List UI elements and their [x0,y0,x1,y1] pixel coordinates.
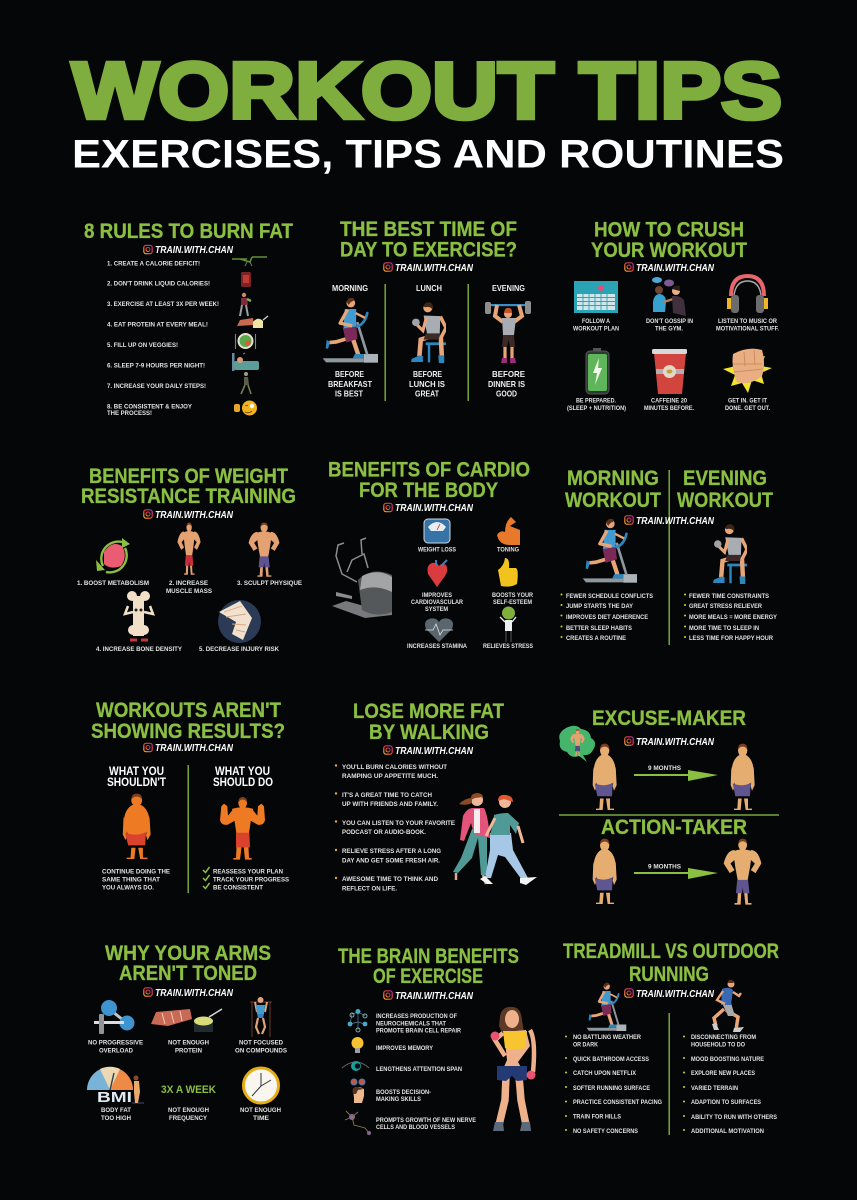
icon: elliptical machine [332,538,392,618]
column: morning [323,283,378,398]
list: morning benefits: JUMP STARTS THE DAY [566,603,633,610]
heading [81,464,296,508]
list: treadmill: QUICK BATHROOM ACCESS [573,1056,649,1063]
arrow: nine months: 9 MONTHS [648,864,682,870]
illustration: treadmill [583,519,637,583]
panel: best time of day [323,217,531,398]
list: walking benefits: REFLECT ON LIFE. [342,886,397,892]
subtitle: EXERCISES, TIPS AND ROUTINES [72,132,784,176]
handle: TRAIN.WITH.CHAN [636,989,715,1000]
heading: TREADMILL VS OUTDOOR [563,939,779,963]
icon: overhead press [485,301,531,363]
item: cardiovascular system: IMPROVES [422,592,452,599]
heading: HOW TO CRUSH [594,218,744,242]
illustration: thought cloud [559,726,595,762]
panel: workouts not showing results [91,698,289,893]
item: stamina [407,618,467,650]
heading [91,698,285,743]
list: treadmill: NO SAFETY CONCERNS [573,1128,638,1135]
handle: TRAIN.WITH.CHAN [395,991,474,1002]
item: headphones [716,276,779,332]
handle: TRAIN.WITH.CHAN [636,737,715,748]
heading [105,941,271,985]
list: evening benefits [684,593,777,642]
item: increase muscle mass: 2. INCREASE [169,580,208,587]
item: protein [151,1009,222,1054]
heading: evening workout [677,466,773,512]
list: evening benefits: MORE TIME TO SLEEP IN [689,625,759,632]
item: stamina: INCREASES STAMINA [407,643,467,650]
heading [591,218,747,262]
column: lunch [409,283,446,398]
icon: plate of veggies [236,333,256,349]
handle: TRAIN.WITH.CHAN [395,263,474,274]
item: fist [723,349,772,412]
list: outdoor: ADAPTION TO SURFACES [691,1099,761,1106]
item: increase muscle mass [166,523,212,595]
column: what you shouldn't: CONTINUE DOING THE [102,868,170,876]
item: workout plan [573,281,619,332]
handle: TRAIN.WITH.CHAN [636,516,715,527]
list: treadmill: PRACTICE CONSISTENT PACING [573,1099,662,1106]
list: walking benefits: RELIEVE STRESS AFTER A LONG [342,848,441,855]
heading: RESISTANCE TRAINING [81,484,296,508]
item: workout plan: WORKOUT PLAN [573,326,619,332]
item: time: NOT ENOUGH [240,1107,281,1114]
heading [563,939,779,986]
heading [338,944,519,988]
item: time [240,1068,281,1122]
handle: TRAIN.WITH.CHAN [636,263,715,274]
item: sculpt physique: 3. SCULPT PHYSIQUE [237,580,302,587]
rules list: 6. SLEEP 7-9 HOURS PER NIGHT! [107,362,205,370]
panel: weight resistance training [77,464,302,653]
item: attention span: LENGTHENS ATTENTION SPAN [376,1066,462,1073]
item: neurochemicals [348,1009,461,1034]
rules list: 7. INCREASE YOUR DAILY STEPS! [107,383,206,390]
item: coffee: MINUTES BEFORE. [644,405,694,412]
item: headphones: LISTEN TO MUSIC OR [718,318,777,325]
column: morning: MORNING [332,283,368,293]
heading: morning workout: WORKOUT [565,488,661,512]
icon: man with dumbbell [240,293,251,316]
rules list: THE PROCESS! [107,410,152,417]
handle: TRAIN.WITH.CHAN [395,503,474,514]
list: outdoor: ABILITY TO RUN WITH OTHERS [691,1114,777,1121]
list: outdoor: DISCONNECTING FROM [691,1034,756,1041]
panel: how to crush your workout [567,218,779,412]
column: what you should do: WHAT YOU [215,764,270,778]
item: cardiovascular system [411,560,463,613]
heading: evening workout: WORKOUT [677,488,773,512]
item: neurochemicals: PROMOTE BRAIN CELL REPAIR [376,1028,461,1034]
item: injury risk [199,600,279,653]
list: treadmill [565,1034,662,1135]
heading: DAY TO EXERCISE? [340,238,517,262]
list: evening benefits: FEWER TIME CONSTRAINTS [689,593,769,600]
heading: SHOWING RESULTS? [91,719,285,743]
column: evening: BEFORE [492,369,525,379]
item: battery: (SLEEP + NUTRITION) [567,405,626,412]
item: coffee [644,349,694,412]
panel: morning vs evening workout [560,466,777,645]
item: body fat: TOO HIGH [101,1115,131,1122]
column: evening: EVENING [492,283,525,293]
item: compounds [235,997,287,1054]
item: headphones: MOTIVATIONAL STUFF. [716,326,779,332]
list: outdoor [683,1034,777,1135]
column: what you shouldn't [102,764,170,892]
illustration: outdoor runner [712,980,744,1032]
illustration: treadmill runner [586,983,626,1031]
heading: evening workout: EVENING [683,466,767,490]
panel: lose more fat by walking [335,699,537,892]
panel: treadmill vs outdoor running [563,939,779,1135]
item: toning [497,517,520,554]
rules list: 1. CREATE A CALORIE DEFICIT! [107,260,200,267]
item: self-esteem [492,558,533,606]
item: frequency: NOT ENOUGH [168,1107,209,1114]
handle: TRAIN.WITH.CHAN [395,746,474,757]
item: progressive overload: OVERLOAD [99,1048,133,1054]
item: coffee: CAFFEINE 20 [651,398,687,404]
list: evening benefits: MORE MEALS = MORE ENERGY [689,614,777,621]
item: protein: NOT ENOUGH [168,1040,209,1046]
title: WORKOUT TIPS [72,46,782,135]
item: cardiovascular system: SYSTEM [425,606,448,613]
list: morning benefits: IMPROVES DIET ADHERENCE [566,614,648,621]
item: weight loss [418,519,456,554]
column: lunch: BEFORE [413,369,442,379]
item: memory: IMPROVES MEMORY [376,1045,433,1052]
item: frequency: FREQUENCY [169,1115,207,1122]
icon: sleeping in bed [232,353,259,371]
rules list: 8. BE CONSISTENT & ENJOY [107,404,192,410]
icon: calorie balance [232,257,267,266]
item: body fat: BMI [97,1090,132,1106]
heading: excuse-maker: EXCUSE-MAKER [592,706,746,730]
item: boost metabolism [77,538,149,587]
handle: TRAIN.WITH.CHAN [155,743,234,754]
illustration: woman with dumbbells [490,1007,536,1131]
item: decision making: MAKING SKILLS [376,1096,421,1103]
list: walking benefits: IT'S A GREAT TIME TO CATCH [342,792,432,799]
figure: excuse-maker before [593,744,617,810]
column: evening: DINNER IS [488,379,525,389]
heading: RUNNING [629,962,709,986]
item: cardiovascular system: CARDIOVASCULAR [411,599,463,606]
icon: thumb and emoji [234,400,257,416]
list: outdoor: VARIED TERRAIN [691,1085,738,1092]
item: gossip: THE GYM. [655,326,683,332]
item: compounds: ON COMPOUNDS [235,1048,287,1054]
item: injury risk: 5. DECREASE INJURY RISK [199,646,279,653]
illustration: couple walking [453,793,537,885]
column: what you shouldn't: WHAT YOU [109,764,164,778]
item: body fat [87,1067,144,1122]
icon: walking man [241,372,251,394]
item: neurochemicals: INCREASES PRODUCTION OF [376,1013,457,1020]
handle: TRAIN.WITH.CHAN [155,988,234,999]
column: evening [485,283,531,398]
heading: THE BEST TIME OF [340,217,517,241]
arrow: nine months [634,864,718,879]
rules list: 2. DON'T DRINK LIQUID CALORIES! [107,281,210,288]
item: fist: DONE. GET OUT. [725,405,770,412]
item: frequency: 3X A WEEK [161,1084,216,1096]
panel: benefits of cardio [328,458,533,650]
item: compounds: NOT FOCUSED [239,1040,283,1046]
heading: FOR THE BODY [359,478,498,502]
heading: LOSE MORE FAT [353,699,504,723]
item: nerve cells: PROMPTS GROWTH OF NEW NERVE [376,1117,476,1124]
column: what you should do: SHOULD DO [213,775,273,789]
heading: OF EXERCISE [373,964,483,988]
item: body fat: BODY FAT [101,1107,132,1114]
list: treadmill: OR DARK [573,1042,598,1048]
heading: YOUR WORKOUT [591,238,747,262]
item: time: TIME [253,1115,270,1122]
column: morning: IS BEST [335,388,363,398]
item: bone density [96,591,182,653]
panel: why your arms aren't toned [87,941,287,1122]
column: lunch: GREAT [415,388,439,398]
item: bone density: 4. INCREASE BONE DENSITY [96,646,182,653]
figure: action-taker after [724,839,761,905]
list: morning benefits: BETTER SLEEP HABITS [566,625,632,632]
list: walking benefits: RAMPING UP APPETITE MUCH. [342,773,438,780]
item: relieves stress: RELIEVES STRESS [483,643,533,650]
heading [328,458,530,502]
list: treadmill: NO BATTLING WEATHER [573,1034,641,1041]
list: walking benefits: AWESOME TIME TO THINK AND [342,876,438,883]
item: boost metabolism: 1. BOOST METABOLISM [77,580,149,587]
item: nerve cells: CELLS AND BLOOD VESSELS [376,1124,455,1131]
item: self-esteem: BOOSTS YOUR [492,592,533,599]
heading: WORKOUTS AREN'T [96,698,281,722]
list: treadmill: TRAIN FOR HILLS [573,1114,621,1120]
panel: excuse-maker vs action-taker [559,706,779,905]
column: morning: BEFORE [335,369,364,379]
item: increase muscle mass: MUSCLE MASS [166,588,212,595]
column: what you should do: BE CONSISTENT [213,884,264,892]
item: decision making [351,1079,431,1103]
item: weight loss: WEIGHT LOSS [418,546,456,554]
item: protein: PROTEIN [175,1048,202,1054]
heading: WHY YOUR ARMS [105,941,271,965]
handle: TRAIN.WITH.CHAN [155,245,234,256]
list: treadmill: CATCH UPON NETFLIX [573,1070,636,1077]
column: what you shouldn't: YOU ALWAYS DO. [102,884,154,892]
icon: meat and protein [237,316,268,328]
list: outdoor: ADDITIONAL MOTIVATION [691,1128,764,1135]
arrow: nine months: 9 MONTHS [648,765,682,772]
item: memory [352,1037,433,1053]
item: self-esteem: SELF-ESTEEM [493,599,532,606]
list: outdoor: EXPLORE NEW PLACES [691,1070,755,1077]
column: what you shouldn't: SAME THING THAT [102,876,161,884]
heading: AREN'T TONED [119,961,257,985]
item: gossip: DON'T GOSSIP IN [646,318,693,325]
item: neurochemicals: NEUROCHEMICALS THAT [376,1020,447,1028]
list: evening benefits: GREAT STRESS RELIEVER [689,603,762,610]
icon: drink [241,272,251,287]
rules list: 4. EAT PROTEIN AT EVERY MEAL! [107,322,208,328]
list: morning benefits: FEWER SCHEDULE CONFLICTS [566,593,653,600]
item: relieves stress [483,606,533,650]
heading [340,217,517,262]
list: walking benefits: YOU CAN LISTEN TO YOUR FAVORITE [342,820,455,827]
column: lunch: LUNCH IS [409,379,445,389]
item: attention span [342,1061,462,1073]
item: progressive overload [88,1000,143,1054]
list: outdoor: HOUSEHOLD TO DO [691,1042,745,1048]
arrow: nine months [634,765,718,781]
heading: BENEFITS OF CARDIO [328,458,530,482]
item: gossip [646,277,693,332]
figure: action-taker before [593,839,617,904]
column: what you shouldn't: SHOULDN'T [107,775,167,789]
handle: TRAIN.WITH.CHAN [155,510,234,521]
list: walking benefits: PODCAST OR AUDIO-BOOK. [342,829,426,836]
list: walking benefits [335,764,455,892]
item: fist: GET IN. GET IT [728,398,768,404]
heading: BY WALKING [369,720,489,744]
item: toning: TONING [497,546,519,554]
item: sculpt physique [237,523,302,587]
item: battery [567,348,626,412]
panel: brain benefits of exercise [338,944,536,1135]
rules list: 5. FILL UP ON VEGGIES! [107,342,178,349]
item: battery: BE PREPARED. [576,398,616,404]
list: walking benefits: UP WITH FRIENDS AND FAMILY. [342,801,438,808]
illustration: seated curl [713,524,747,585]
item: nerve cells [345,1111,476,1135]
item: frequency [161,1084,216,1122]
figure: excuse-maker after [731,744,755,810]
item: workout plan: FOLLOW A [582,318,610,325]
list: outdoor: MOOD BOOSTING NATURE [691,1056,764,1063]
column: what you should do: REASSESS YOUR PLAN [213,868,283,876]
list: walking benefits: DAY AND GET SOME FRESH AIR. [342,858,440,864]
heading: morning workout: MORNING [567,466,659,490]
heading: BENEFITS OF WEIGHT [89,464,288,488]
column: evening: GOOD [496,388,517,398]
list: morning benefits: CREATES A ROUTINE [566,635,626,642]
column: what you should do [203,764,289,892]
column: morning: BREAKFAST [328,379,372,389]
column: what you should do: TRACK YOUR PROGRESS [213,876,289,884]
list: treadmill: SOFTER RUNNING SURFACE [573,1085,650,1092]
heading: morning workout [565,466,661,512]
rules list: 3. EXERCISE AT LEAST 3X PER WEEK! [107,301,219,308]
item: decision making: BOOSTS DECISION- [376,1089,431,1096]
heading: action-taker: ACTION-TAKER [601,815,747,839]
item: progressive overload: NO PROGRESSIVE [88,1040,143,1046]
list: evening benefits: LESS TIME FOR HAPPY HOUR [689,635,773,642]
heading [353,699,504,744]
panel: 8 rules to burn fat [84,219,293,417]
heading: THE BRAIN BENEFITS [338,944,519,968]
rules list [107,260,219,417]
list: morning benefits [560,593,653,642]
heading: 8 RULES TO BURN FAT [84,219,293,243]
list: walking benefits: YOU'LL BURN CALORIES WITHOUT [342,764,448,771]
column: lunch: LUNCH [416,283,442,293]
